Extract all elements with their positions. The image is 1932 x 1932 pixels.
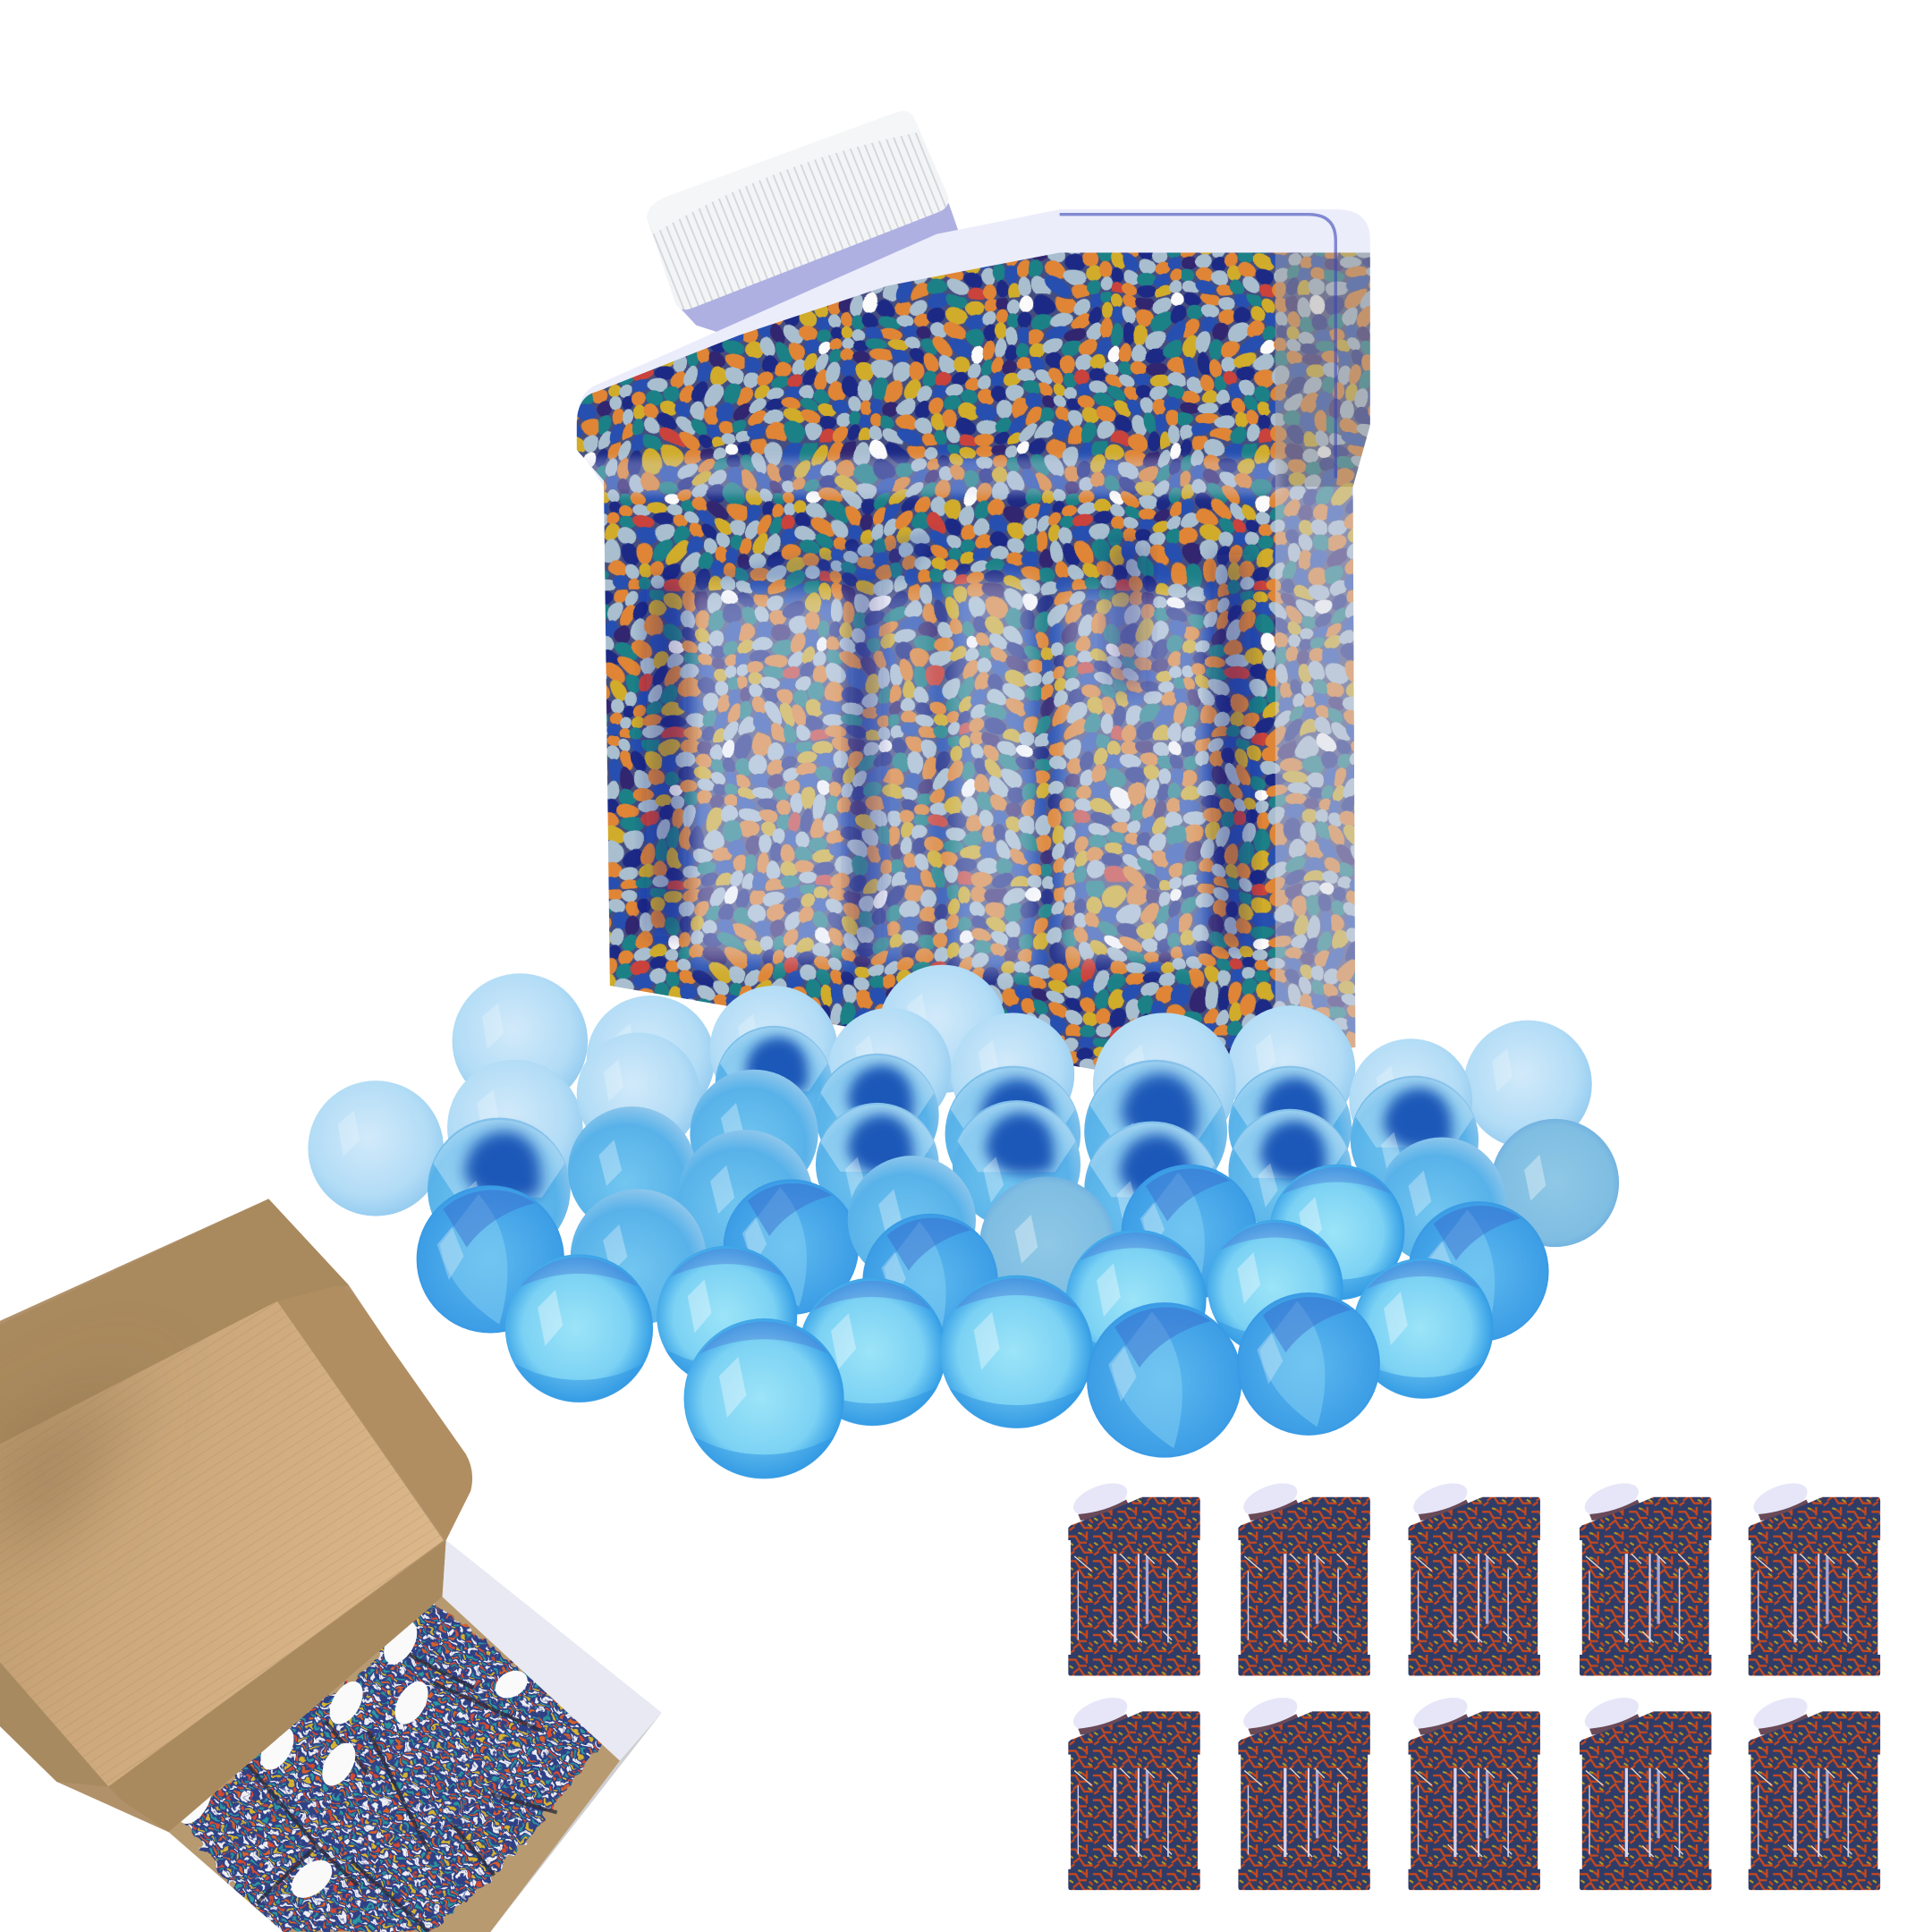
cluster of blue water beads — [308, 965, 1619, 1479]
grid of ten small bottles — [1068, 1477, 1880, 1890]
beads fill — [576, 252, 1370, 1070]
box lid side flap — [277, 1286, 472, 1540]
main bottle of water beads — [576, 111, 1370, 1070]
cardboard box with bottles — [0, 1199, 662, 1932]
box lid inner panel — [0, 1301, 444, 1786]
box outer grey edge — [473, 1713, 662, 1932]
bottle clear shoulder — [579, 209, 1370, 487]
box back flap — [0, 1199, 349, 1444]
white bottle cap — [647, 111, 948, 309]
bottles inside box — [171, 1602, 605, 1932]
box left flap — [0, 1662, 108, 1786]
box floor — [169, 1597, 620, 1932]
box front wall — [108, 1540, 446, 1832]
box lid shadow — [0, 1368, 148, 1564]
box white side — [443, 1540, 662, 1761]
icon: bottle neck — [680, 203, 959, 335]
separators between bottles — [247, 1650, 557, 1932]
bottle moulded panels haze — [579, 252, 1374, 1066]
blue edge highlight — [1060, 215, 1335, 478]
box silhouette — [0, 1199, 470, 1832]
